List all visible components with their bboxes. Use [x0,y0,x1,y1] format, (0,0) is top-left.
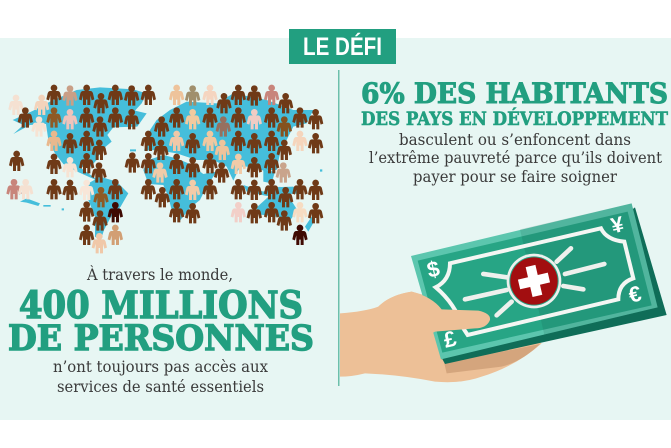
description: services de santé essentiels [57,377,264,396]
illustration: hand holding banknote [340,203,667,382]
currency symbols: £ [441,326,459,353]
banknote frame [436,228,633,335]
banknote [411,203,658,359]
description: n’ont toujours pas accès aux [53,357,268,376]
people: row 2 [18,107,323,137]
currency symbols: € [626,281,644,308]
people: rows 6 and 7 [79,201,323,253]
medallion [507,254,561,308]
description [369,130,663,186]
medical cross [516,263,552,299]
heading: 400 millions: 400 MILLIONS [19,283,303,327]
title: le défi [289,29,396,64]
intro line: À travers le monde, [86,264,233,284]
people: row 3 [46,131,323,160]
description: payer pour se faire soigner [413,167,617,186]
sheen on banknote [520,203,658,335]
currency symbols [425,211,644,353]
people: row 1 [8,85,293,115]
currency symbols: ¥ [608,211,627,238]
title: le défi: LE DÉFI [303,32,382,61]
people: row 5 [6,179,323,207]
heading: de personnes: DE PERSONNES [8,318,314,359]
world map of people [6,85,323,253]
description [53,357,268,396]
text: left statistic [8,264,314,396]
description: basculent ou s’enfoncent dans [399,130,631,149]
currency symbols: $ [425,256,442,283]
shadow under bills [444,344,540,373]
rays [465,248,604,315]
people: row 4 [9,151,291,183]
back bills [441,207,667,364]
column divider [338,70,340,386]
banknote field [418,212,652,353]
thumb [378,292,490,347]
map: continents [13,87,322,241]
text: right statistic [361,77,668,186]
hand palm [340,292,542,382]
